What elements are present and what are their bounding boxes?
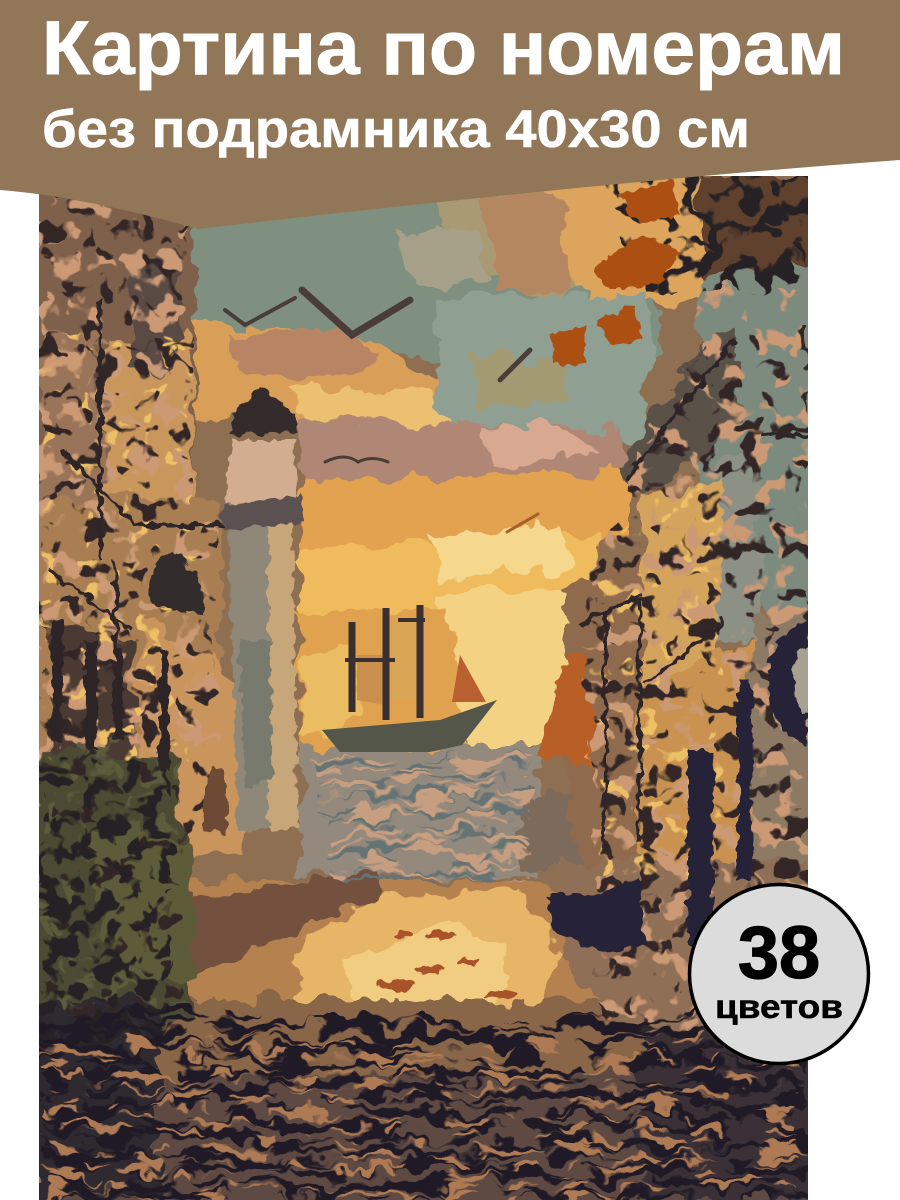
road speckles xyxy=(375,931,516,999)
masts xyxy=(345,605,425,720)
lower left deep shadow xyxy=(39,760,170,1040)
top banner xyxy=(0,0,900,229)
left wall mottling gold xyxy=(39,330,190,760)
building shadow lines xyxy=(50,300,808,850)
ship xyxy=(322,605,497,752)
painting xyxy=(30,176,820,1200)
sea ripples xyxy=(315,755,530,880)
left greenery xyxy=(39,740,180,1010)
top right foliage dark xyxy=(600,176,808,290)
right wall mottling light xyxy=(585,290,808,1040)
sky and large colour areas xyxy=(30,176,820,1200)
road xyxy=(160,880,640,1040)
badge number: 38 xyxy=(738,911,820,994)
foreground paint patches xyxy=(50,180,817,999)
subtitle: без подрамника 40х30 см xyxy=(42,100,750,159)
sea xyxy=(300,745,540,875)
painting base xyxy=(39,176,808,1200)
left wall mottling light xyxy=(39,176,215,760)
dark window frames left xyxy=(52,620,169,770)
right door, dark sign and barrel xyxy=(548,620,808,952)
sign interior xyxy=(791,648,808,714)
cobbles tan xyxy=(39,1040,800,1200)
seagulls xyxy=(225,290,538,532)
hull xyxy=(322,700,497,752)
title: Картина по номерам xyxy=(42,6,845,91)
mottled paint texture xyxy=(39,176,808,1200)
lighthouse xyxy=(222,385,305,830)
cobbles dark xyxy=(39,1000,808,1200)
cobbles base xyxy=(39,1030,808,1200)
badge circle xyxy=(690,884,868,1064)
left wall mottling dark xyxy=(39,176,215,1040)
left buildings xyxy=(39,194,200,498)
badge label: цветов xyxy=(715,988,843,1025)
autumn leaves xyxy=(550,180,680,365)
arched doors and lamp xyxy=(204,765,226,835)
right wall mottling dark xyxy=(585,330,808,1040)
sails xyxy=(452,655,486,702)
badge: 38 colours xyxy=(690,884,868,1064)
right wall mottling gold xyxy=(585,480,720,880)
right buildings xyxy=(700,260,820,620)
